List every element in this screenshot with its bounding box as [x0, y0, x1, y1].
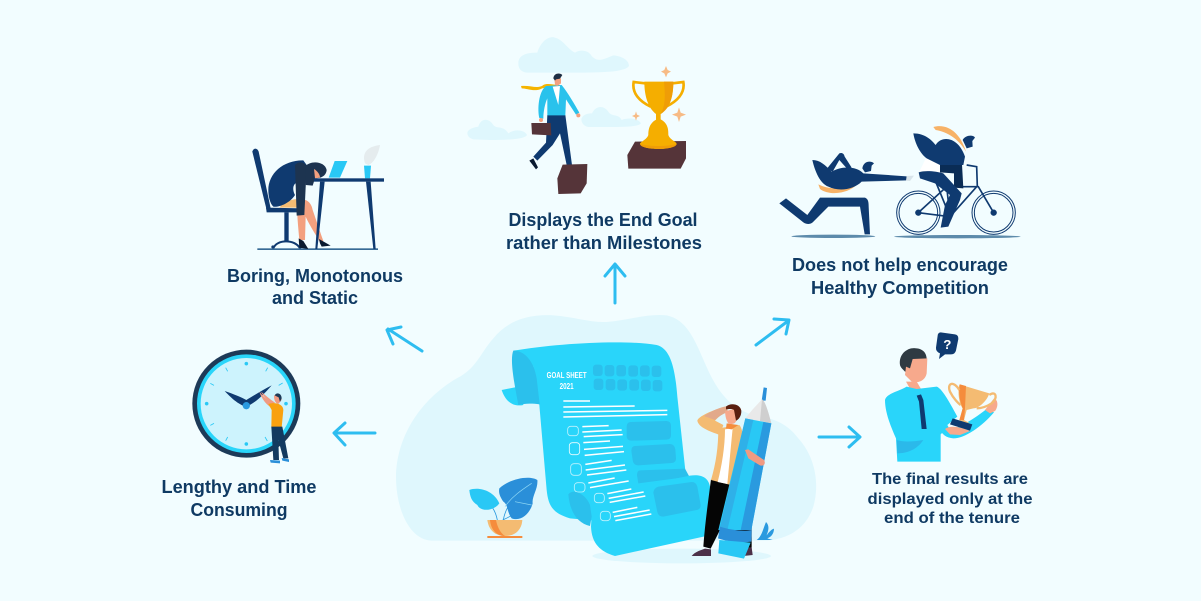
note boxes	[627, 421, 689, 483]
runner	[779, 153, 907, 234]
scroll top fold	[512, 351, 540, 405]
cyclist scarf	[933, 126, 966, 152]
step	[557, 164, 587, 194]
label: final results: end of the tenure	[884, 510, 1020, 527]
label: healthy competition: Healthy Competition	[811, 278, 989, 298]
climber	[529, 74, 580, 172]
sparkles	[632, 66, 686, 122]
tie scarf	[521, 84, 560, 90]
arrow: to healthy competition	[756, 319, 789, 345]
label: final results: displayed only at the	[868, 491, 1033, 508]
man	[885, 348, 997, 462]
label: final results: The final results are	[872, 471, 1028, 488]
label: displays the end goal: rather than Milestones	[506, 233, 702, 253]
label: final results	[868, 471, 1033, 527]
man adjusting hands	[259, 392, 289, 463]
calendar grid	[593, 365, 662, 391]
label: healthy competition	[792, 255, 1008, 298]
arrow: to final results	[819, 427, 860, 447]
illustration: tired woman at desk	[252, 145, 384, 250]
sheet title: GOAL SHEET	[547, 370, 587, 380]
man	[692, 404, 753, 556]
plant	[469, 478, 537, 538]
background blob	[396, 315, 816, 541]
woman	[268, 160, 331, 249]
lower note box	[653, 482, 701, 517]
lower page	[591, 475, 718, 556]
laptop	[329, 161, 347, 178]
label: healthy competition: Does not help encourage	[792, 255, 1008, 275]
chair	[252, 149, 303, 249]
vase and plant	[364, 145, 380, 178]
arrow: to lengthy and time consuming	[334, 423, 375, 445]
speech bubble: ?	[943, 337, 951, 352]
pencil	[718, 387, 771, 559]
illustration: runner chasing cyclist	[779, 126, 1021, 238]
label: boring, monotonous and static	[227, 266, 403, 308]
hand on pencil	[745, 449, 765, 466]
label: lengthy and time consuming: Lengthy and Time	[162, 477, 316, 497]
label: displays the end goal	[506, 210, 702, 253]
small sprout	[757, 522, 774, 540]
arrow: to end goal	[605, 264, 625, 303]
bicycle	[897, 165, 1015, 234]
clock rim	[192, 350, 300, 458]
checkboxes	[568, 426, 585, 492]
text lines	[563, 401, 667, 488]
label: boring, monotonous and static: and Static	[272, 288, 358, 308]
label: lengthy and time consuming: Consuming	[190, 500, 288, 520]
runner scarf	[818, 182, 859, 193]
central illustration: goal sheet and man with pencil	[396, 315, 816, 563]
hour marks	[205, 362, 288, 446]
clock hands	[225, 385, 272, 407]
clouds	[467, 37, 641, 140]
lower page checkboxes	[594, 493, 610, 521]
arrow: to boring monotonous	[387, 327, 422, 351]
lower fold	[568, 492, 592, 526]
scroll main page	[513, 342, 686, 523]
label: displays the end goal: Displays the End Goal	[508, 210, 698, 230]
illustration: clock with man	[192, 350, 300, 463]
label: boring, monotonous and static: Boring, Monotonous	[227, 266, 403, 286]
ground shadows	[791, 235, 875, 238]
floor line	[257, 248, 378, 250]
illustration: climber and trophy	[467, 37, 686, 194]
illustration: man holding trophy	[885, 332, 997, 462]
sheet title	[547, 370, 587, 391]
label: lengthy and time consuming	[162, 477, 316, 520]
scroll back curl	[502, 386, 523, 405]
shadow under sheet	[592, 549, 771, 563]
sheet title: 2021	[560, 381, 574, 391]
desk	[314, 178, 384, 249]
trophy	[949, 384, 996, 431]
lower page lines	[607, 489, 651, 521]
cyclist	[913, 133, 975, 228]
trophy	[627, 82, 686, 169]
